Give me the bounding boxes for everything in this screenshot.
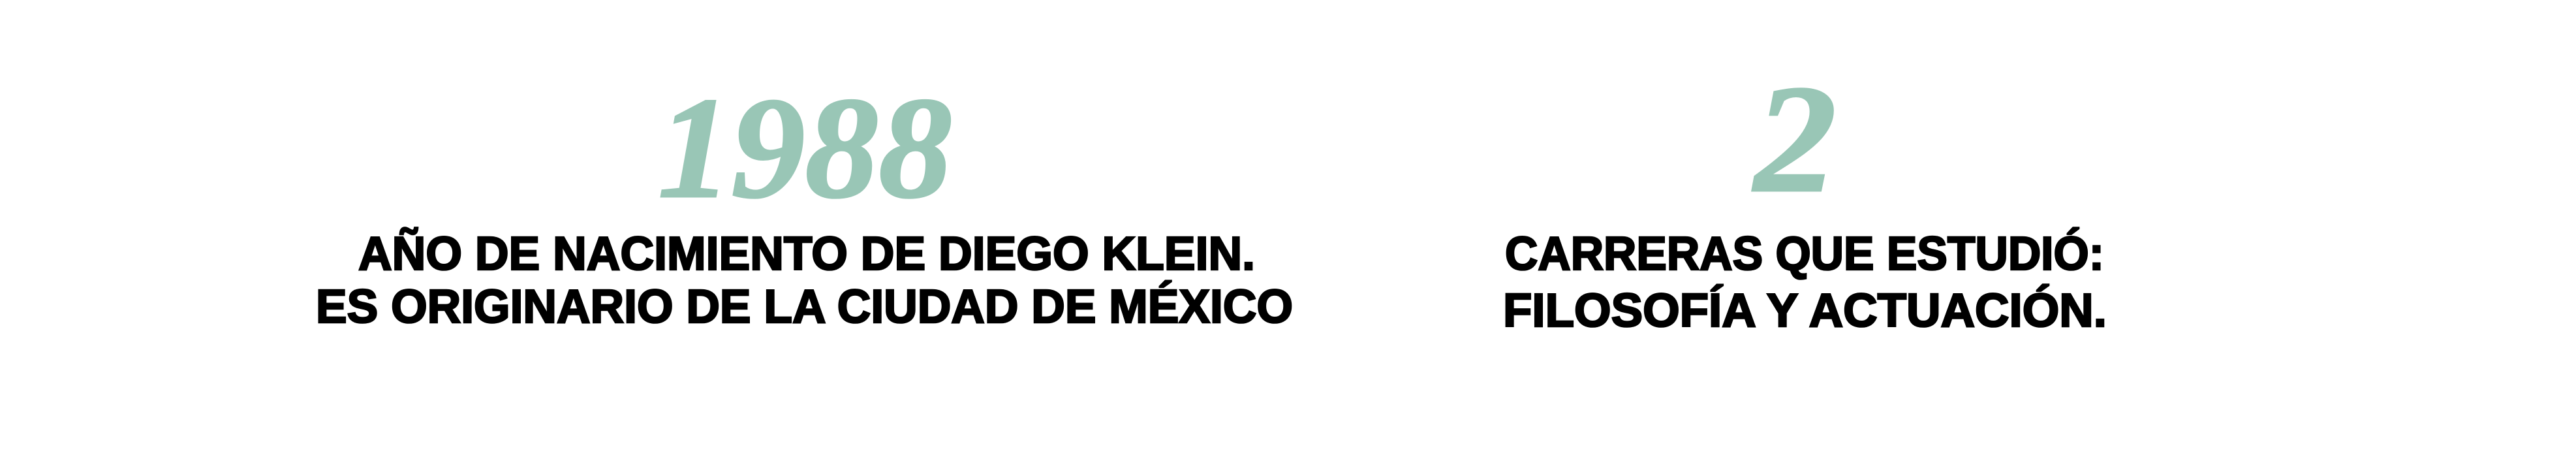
panel: careers — [1503, 54, 2107, 337]
text block: birth year caption — [316, 227, 1293, 333]
big number: 2: 2 — [1752, 54, 1837, 225]
text block: birth year caption: AÑO DE NACIMIENTO DE DIEGO KLEIN. — [358, 227, 1255, 280]
text block: careers caption: FILOSOFÍA Y ACTUACIÓN. — [1503, 284, 2107, 337]
text block: birth year caption: ES ORIGINARIO DE LA CIUDAD DE MÉXICO — [316, 281, 1293, 333]
big number: 1988: 1988 — [658, 68, 952, 229]
text block: careers caption: CARRERAS QUE ESTUDIÓ: — [1505, 227, 2104, 280]
panel: birth year — [316, 68, 1293, 333]
text block: careers caption — [1503, 227, 2107, 337]
